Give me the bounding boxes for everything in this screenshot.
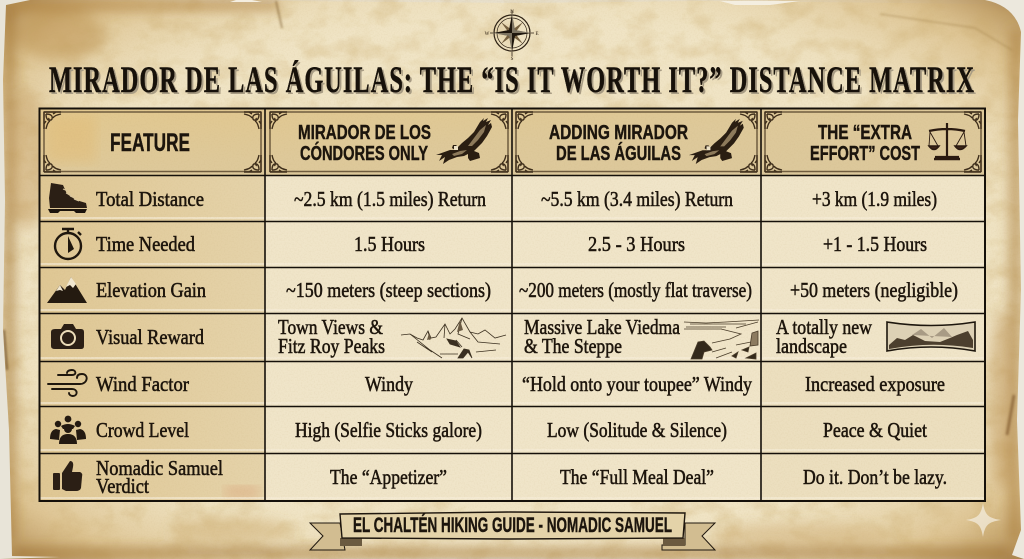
header row background xyxy=(39,108,985,175)
row: time needed: 1.5 Hours xyxy=(354,232,425,256)
row: crowd level: High (Selfie Sticks galore) xyxy=(295,418,482,442)
icon: wind xyxy=(48,370,87,396)
row: total distance: ~5.5 km (3.4 miles) Return xyxy=(541,187,733,211)
row: elevation gain: ~150 meters (steep sections) xyxy=(286,278,491,302)
icon: thumbs up xyxy=(53,461,82,491)
row: wind factor: Wind Factor xyxy=(96,372,189,396)
feature column background xyxy=(39,175,265,501)
row: wind factor: “Hold onto your toupee” Windy xyxy=(522,372,752,396)
row: wind factor: Windy xyxy=(365,372,413,396)
row: visual reward xyxy=(51,315,975,359)
row: wind factor xyxy=(48,370,945,396)
row: wind factor: Increased exposure xyxy=(805,372,945,396)
header: extra effort: THE “EXTRA xyxy=(818,122,912,144)
row: time needed: +1 - 1.5 Hours xyxy=(823,232,927,256)
row: crowd level xyxy=(50,416,927,444)
row: verdict: The “Full Meal Deal” xyxy=(560,465,714,489)
icon: lake sketch xyxy=(684,320,759,359)
icon: scales xyxy=(929,123,966,159)
icon: camera xyxy=(51,324,84,349)
panel: distance matrix table xyxy=(39,108,985,501)
row: visual reward: Visual Reward xyxy=(96,325,204,349)
row: elevation gain: +50 meters (negligible) xyxy=(790,278,958,302)
icon: crowd xyxy=(50,416,86,444)
row: time needed xyxy=(55,229,927,259)
row: elevation gain: Elevation Gain xyxy=(96,278,206,302)
icon: compass rose: E xyxy=(535,32,539,37)
row: verdict: The “Appetizer” xyxy=(330,465,447,489)
footer ribbon banner: EL CHALTÉN HIKING GUIDE - NOMADIC SAMUEL xyxy=(353,514,672,537)
row: visual reward: & The Steppe xyxy=(524,334,622,358)
header ornamental frames xyxy=(44,112,981,172)
footer ribbon banner xyxy=(310,512,715,550)
row: crowd level: Low (Solitude & Silence) xyxy=(547,418,727,442)
icon: mountains xyxy=(47,277,87,303)
header: condores: CÓNDORES ONLY xyxy=(300,141,428,165)
row: visual reward: Fitz Roy Peaks xyxy=(278,334,385,358)
row: crowd level: Peace & Quiet xyxy=(823,418,927,442)
icon: compass rose xyxy=(485,10,539,62)
header: extra effort: EFFORT” COST xyxy=(810,143,920,165)
row: elevation gain xyxy=(47,277,958,303)
icon: sparkle watermark xyxy=(966,503,1001,537)
icon: eagle xyxy=(689,119,744,164)
icon: panorama xyxy=(887,322,975,351)
icon: hiking boot xyxy=(48,183,87,213)
row: time needed: 2.5 - 3 Hours xyxy=(588,232,685,256)
header: aguilas xyxy=(549,122,688,165)
row: total distance: +3 km (1.9 miles) xyxy=(812,187,937,211)
row: verdict: Do it. Don’t be lazy. xyxy=(803,465,947,489)
row: time needed: Time Needed xyxy=(96,232,195,256)
row: visual reward: Town Views & xyxy=(278,315,383,339)
row: total distance xyxy=(48,183,937,213)
icon: condor xyxy=(436,118,492,164)
row: crowd level: Crowd Level xyxy=(96,418,189,442)
header: aguilas: DE LAS ÁGUILAS xyxy=(556,142,681,165)
header: condores xyxy=(298,122,431,165)
row: verdict: Nomadic Samuel xyxy=(96,456,223,480)
row: verdict: Verdict xyxy=(96,474,149,498)
cell highlights xyxy=(40,218,984,498)
header: extra effort xyxy=(810,122,920,165)
row: verdict xyxy=(53,456,947,498)
header: aguilas: ADDING MIRADOR xyxy=(549,122,688,144)
row: total distance: ~2.5 km (1.5 miles) Return xyxy=(294,187,486,211)
grid lines xyxy=(39,108,985,501)
icon: stopwatch xyxy=(55,229,81,259)
row: visual reward: A totally new xyxy=(776,315,873,339)
row: visual reward: Massive Lake Viedma xyxy=(524,315,681,339)
row: visual reward: landscape xyxy=(776,334,847,358)
row: total distance: Total Distance xyxy=(96,187,204,211)
icon: compass rose: N xyxy=(510,10,514,15)
header: feature: FEATURE xyxy=(110,129,190,157)
row: elevation gain: ~200 meters (mostly flat traverse) xyxy=(519,278,752,302)
icon: Fitz Roy sketch xyxy=(401,318,506,358)
icon: compass rose: W xyxy=(485,32,490,37)
header: condores: MIRADOR DE LOS xyxy=(298,122,431,144)
icon: compass rose: S xyxy=(511,57,514,62)
